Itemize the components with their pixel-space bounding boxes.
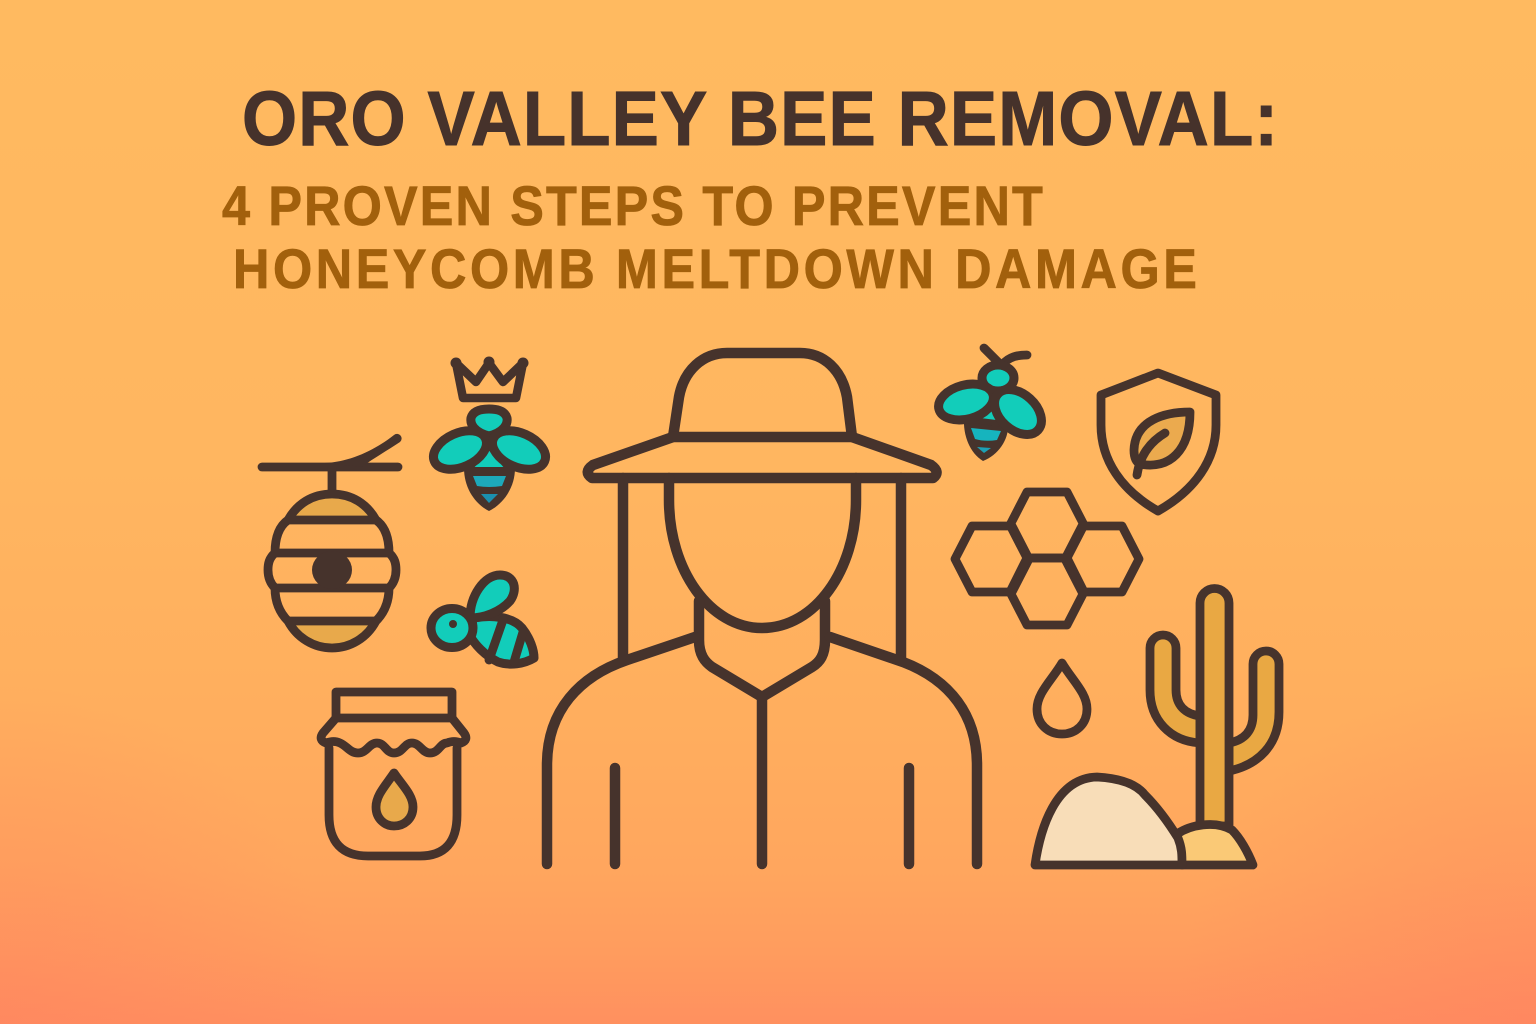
icon: worker bee top right bbox=[935, 348, 1050, 461]
hive stem bbox=[328, 467, 336, 494]
branch bbox=[262, 434, 402, 467]
icon: queen bee with crown bbox=[428, 356, 551, 511]
worker head bbox=[982, 365, 1014, 391]
cactus right arm bbox=[1229, 651, 1279, 771]
jar lid bbox=[336, 692, 452, 718]
icon: cactus and rocks bbox=[1035, 588, 1279, 865]
queen wings bbox=[428, 423, 492, 477]
queen thorax bbox=[468, 446, 510, 470]
hive body bbox=[268, 494, 396, 648]
subtitle line 2: HONEYCOMB MELTDOWN DAMAGE bbox=[233, 239, 1197, 301]
worker abdomen bbox=[964, 418, 1008, 461]
beekeeper hat brim bbox=[588, 437, 937, 478]
side bee body bbox=[468, 617, 534, 664]
right cell bbox=[1065, 526, 1139, 592]
queen abdomen bbox=[464, 468, 515, 511]
neck and collar bbox=[699, 601, 825, 697]
cactus left arm bbox=[1150, 635, 1200, 743]
icon: shield with leaf bbox=[1101, 373, 1216, 511]
icon: honeycomb cells bbox=[955, 492, 1139, 625]
shirt lines bbox=[615, 697, 909, 864]
side bee stripes bbox=[489, 620, 523, 662]
veil bbox=[623, 478, 901, 660]
icon: beekeeper figure bbox=[547, 353, 977, 864]
shoulders and arms bbox=[547, 637, 977, 864]
face bbox=[669, 478, 856, 628]
worker thorax bbox=[972, 402, 1004, 424]
worker wings bbox=[935, 378, 997, 426]
icon: beehive hanging from branch bbox=[262, 434, 402, 648]
large rock bbox=[1035, 777, 1182, 865]
subtitle bbox=[222, 176, 1197, 301]
crown bbox=[450, 356, 528, 398]
small sand mound bbox=[1177, 824, 1253, 865]
top cell bbox=[1010, 492, 1084, 558]
cactus trunk bbox=[1200, 588, 1229, 826]
icon: honey jar bbox=[321, 692, 466, 856]
subtitle line 1: 4 PROVEN STEPS TO PREVENT bbox=[222, 176, 1043, 238]
antennae bbox=[984, 348, 1027, 364]
side bee head bbox=[431, 608, 473, 648]
beekeeper hat crown bbox=[673, 353, 852, 437]
icon: side-view bee bbox=[431, 575, 534, 664]
queen head bbox=[471, 409, 507, 436]
shield outline bbox=[1101, 373, 1216, 511]
jar honey drop bbox=[376, 773, 413, 826]
jar body bbox=[329, 748, 457, 856]
hive top and bottom fill bbox=[288, 494, 376, 648]
bottom cell bbox=[1010, 558, 1084, 625]
leaf bbox=[1134, 412, 1190, 465]
title: ORO VALLEY BEE REMOVAL: bbox=[242, 75, 1278, 162]
hive entrance bbox=[312, 551, 352, 589]
leaf stem bbox=[1137, 433, 1165, 475]
jar cloth bbox=[321, 718, 466, 753]
icon: water drop bbox=[1037, 663, 1087, 734]
side bee wing bbox=[470, 575, 514, 618]
left cell bbox=[955, 526, 1029, 592]
